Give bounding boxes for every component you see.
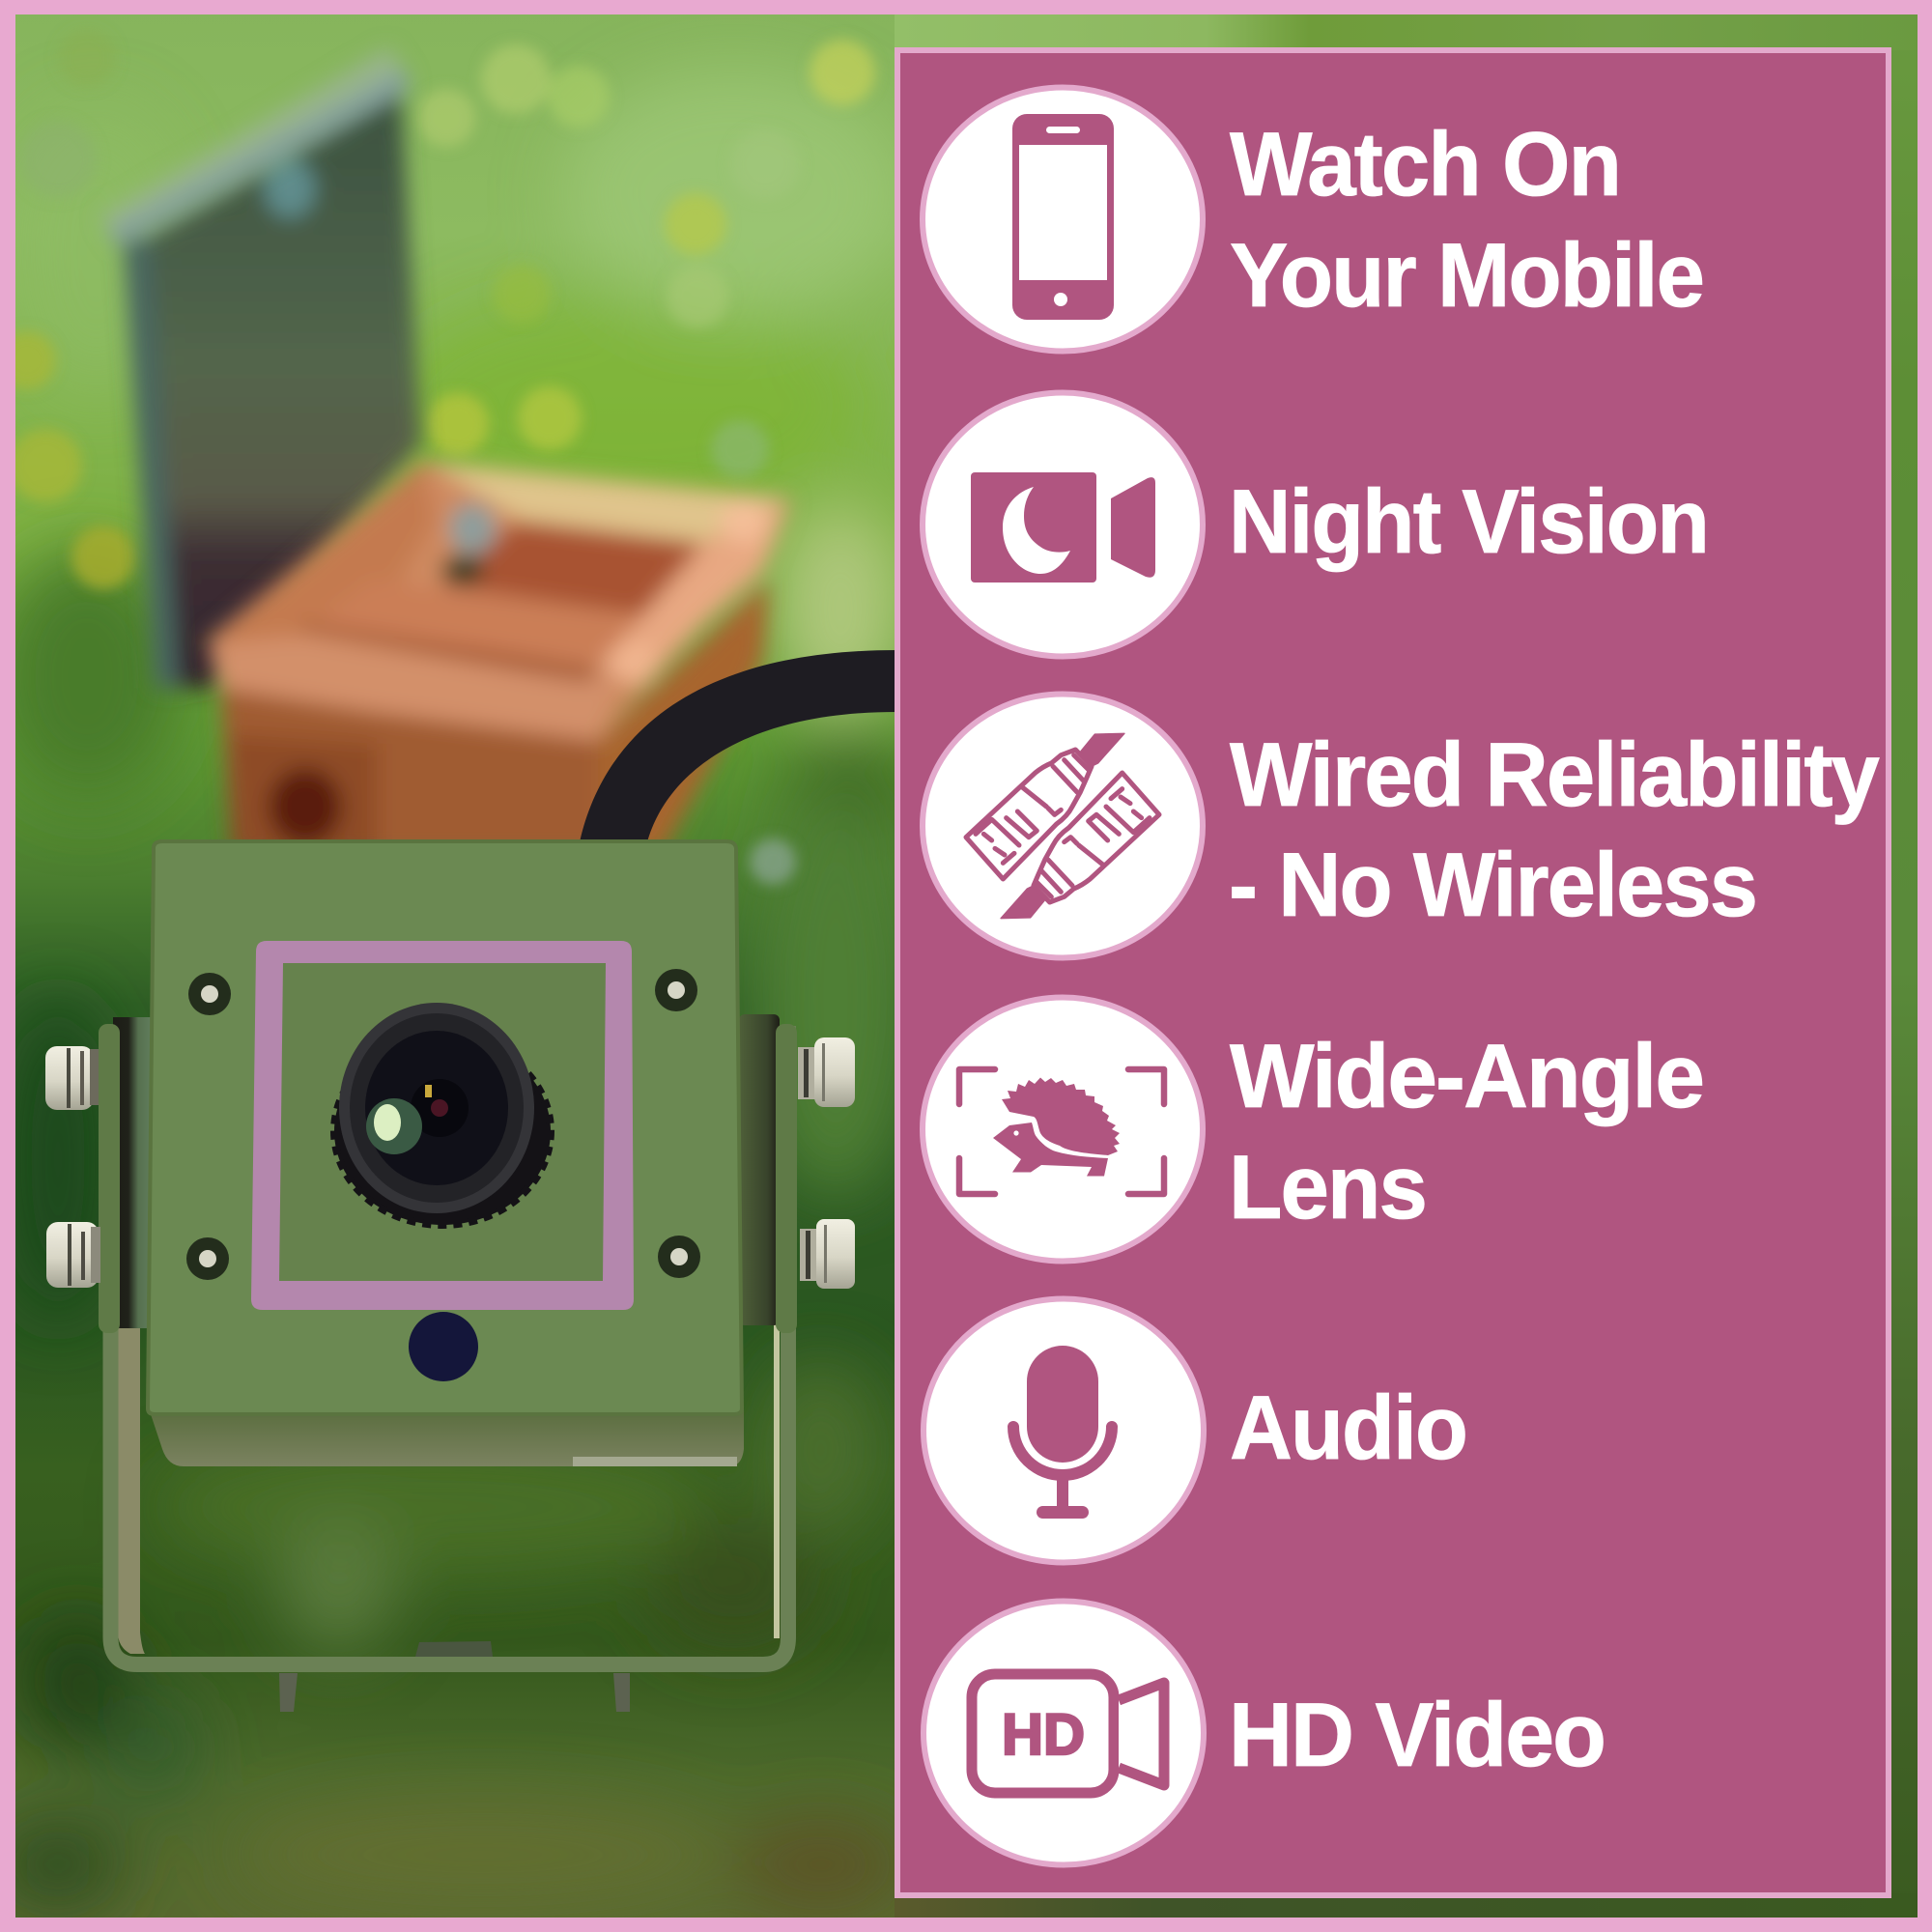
text: Wired Reliability <box>1230 724 1880 825</box>
cable <box>580 650 896 842</box>
text: Wide-Angle <box>1230 1025 1703 1126</box>
lens <box>334 1003 551 1225</box>
text: Lens <box>1229 1136 1426 1237</box>
thumb screws <box>45 1037 855 1289</box>
icon: hd camera: HD <box>1002 1702 1085 1767</box>
feature: audio <box>923 1298 1466 1563</box>
pink lens plate <box>251 941 634 1310</box>
feature: night vision <box>923 392 1708 657</box>
background strips beside the panel <box>895 0 1932 1932</box>
panel: features <box>897 50 1889 1895</box>
icon: ethernet plugs <box>966 733 1159 919</box>
text: HD Video <box>1229 1684 1605 1785</box>
icon: hedgehog in frame <box>959 1069 1164 1194</box>
corner screws <box>186 969 700 1280</box>
camera housing <box>148 841 744 1466</box>
bird box on a post <box>100 47 421 688</box>
text: Audio <box>1230 1377 1466 1478</box>
feature: wide-angle lens <box>923 997 1703 1262</box>
icon: night camera <box>971 472 1155 582</box>
text: Night Vision <box>1229 470 1708 572</box>
text: Your Mobile <box>1230 224 1703 326</box>
icon: hd camera <box>972 1674 1164 1793</box>
feature: wired reliability <box>923 694 1880 958</box>
side mount plates <box>99 1014 797 1333</box>
icon: microphone <box>1013 1346 1112 1519</box>
camera photo <box>45 650 896 1712</box>
feature: watch on your mobile <box>923 87 1703 352</box>
feature: hd video <box>923 1602 1605 1864</box>
bokeh highlights <box>0 29 875 885</box>
wooden hedgehog house <box>207 462 791 855</box>
infrared LED <box>409 1312 478 1381</box>
text: - No Wireless <box>1229 834 1756 935</box>
text: Watch On <box>1230 113 1620 214</box>
mounting bracket <box>110 1026 788 1712</box>
icon: smartphone <box>1012 114 1114 320</box>
